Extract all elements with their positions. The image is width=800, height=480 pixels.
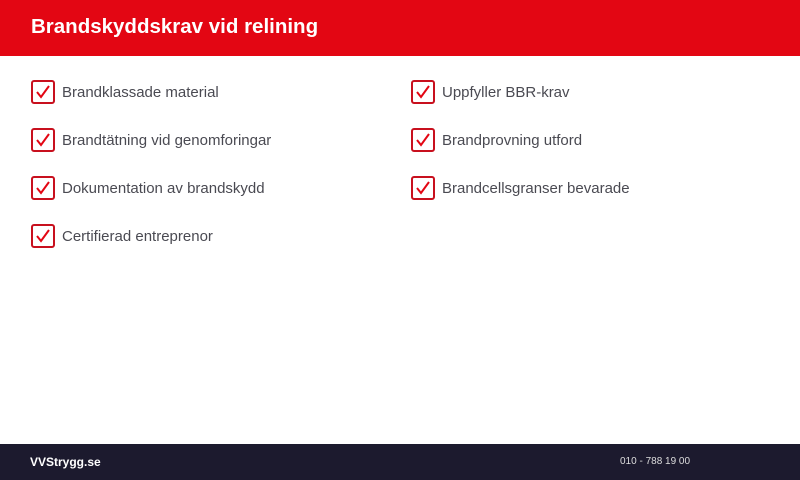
item: Brandtätning (31, 128, 271, 152)
item: Brandklassade material: Brandklassade material (62, 84, 219, 101)
item: Certifierad (31, 224, 213, 248)
item: Brandklassade material (31, 80, 219, 104)
item: Dokumentation: Dokumentation av brandskydd (62, 180, 265, 197)
item: BBR: Uppfyller BBR-krav (442, 84, 570, 101)
footer (0, 444, 800, 480)
brand: VVStrygg.se (30, 455, 101, 469)
item: Brandcellsgranser: Brandcellsgranser bevarade (442, 180, 630, 197)
item: Brandprovning (411, 128, 582, 152)
header bar (0, 0, 800, 56)
item: Brandtätning: Brandtätning vid genomforingar (62, 132, 271, 149)
item: Certifierad: Certifierad entreprenor (62, 228, 213, 245)
item: Dokumentation (31, 176, 265, 200)
phone: 010 - 788 19 00 (620, 456, 690, 467)
item: Brandprovning: Brandprovning utford (442, 132, 582, 149)
title: Brandskyddskrav vid relining (31, 15, 318, 38)
item: Brandcellsgranser (411, 176, 630, 200)
item: BBR (411, 80, 570, 104)
